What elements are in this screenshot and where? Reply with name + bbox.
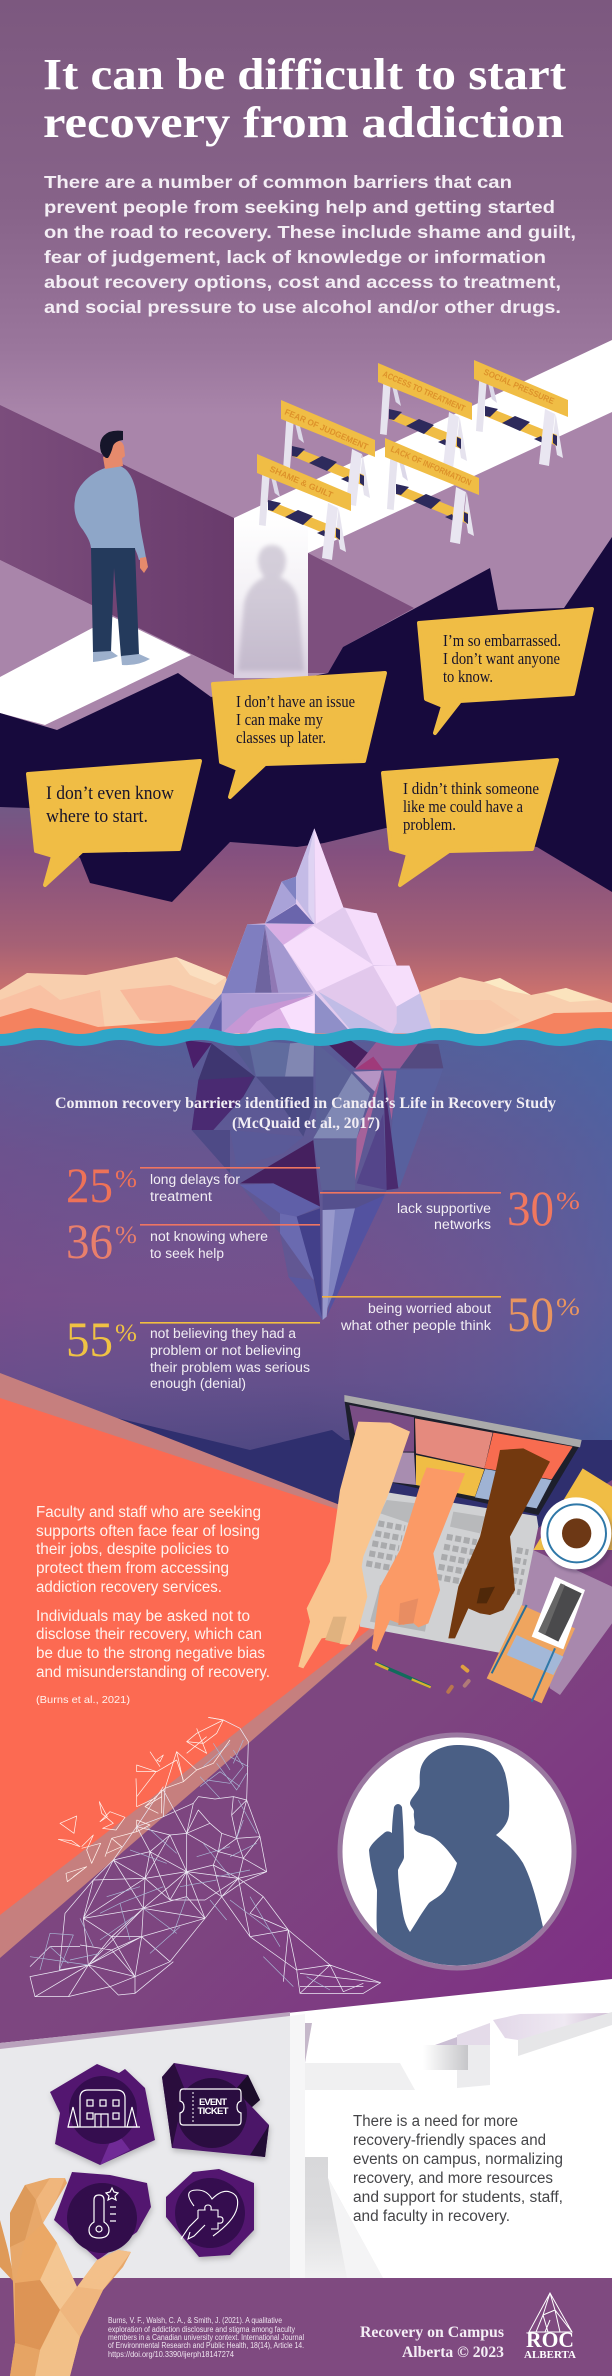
logo: ROC Alberta: ALBERTA: [524, 2349, 576, 2361]
sweater: [74, 465, 146, 560]
speech bubble: where to start: where to start.: [46, 807, 148, 827]
shushing silhouette: [369, 1745, 543, 1985]
barricade: social pressure: [474, 360, 568, 466]
speech bubble: no issue: I can make my: [236, 710, 324, 729]
speech bubble: someone like me: I didn’t think someone: [403, 779, 539, 798]
coral panel text: and misunderstanding of recovery.: [36, 1664, 270, 1681]
barricade: shame and guilt: [257, 454, 351, 560]
coral panel text: Individuals may be asked not to: [36, 1608, 250, 1625]
stat: 50 percent: 50: [507, 1286, 554, 1342]
mesh: blue accent lines: [30, 1740, 330, 1990]
need for spaces text: and faculty in recovery.: [353, 2208, 510, 2225]
laptop screen bezel: [344, 1399, 580, 1515]
badge: campus building: [50, 2064, 155, 2165]
coffee saucer and cup: [541, 1497, 612, 1573]
pen: [375, 1663, 431, 1687]
muted stripe: [0, 1373, 400, 1958]
stat: 55 percent: not believing they had a: [150, 1326, 297, 1341]
icon: thermometer and star: [89, 2188, 118, 2238]
speech bubble: someone like me: problem.: [403, 815, 456, 834]
barricade: shame and guilt: SHAME & GUILT: [268, 464, 335, 500]
white lit gap band: [234, 518, 308, 678]
pale arm: [298, 1422, 410, 1668]
stat: 50 percent: %: [556, 1294, 580, 1321]
speech bubble: embarrassed: I’m so embarrassed.: [443, 631, 561, 650]
chart heading: (McQuaid et al., 2017): [232, 1115, 380, 1132]
yellow sheet: [533, 1468, 612, 1550]
need for spaces text: recovery, and more resources: [353, 2170, 553, 2187]
stat: 55 percent: 55: [66, 1311, 113, 1367]
copyright: Alberta © 2023: [402, 2344, 504, 2361]
left wall panel: [0, 2016, 290, 2279]
stat: 50 percent: being worried about: [368, 1301, 491, 1316]
barricade: fear of judgement: FEAR OF JUDGEMENT: [283, 407, 370, 452]
barricade: social pressure: SOCIAL PRESSURE: [482, 367, 556, 406]
badge: event ticket: [162, 2063, 269, 2157]
brown arm: [448, 1448, 550, 1638]
speech bubble: no issue: [213, 673, 385, 797]
citation: [108, 2316, 304, 2359]
stat: 55 percent: problem or not believing: [150, 1343, 301, 1358]
paper clips: [445, 1664, 471, 1695]
speech bubble: where to start: I don’t even know: [46, 784, 175, 804]
lower purple background: [0, 1480, 612, 2050]
coral panel text: supports often face fear of losing: [36, 1523, 260, 1540]
hand: [140, 557, 148, 573]
stat: 55 percent: %: [115, 1320, 137, 1347]
intro paragraph: on the road to recovery. These include shame and guilt,: [44, 222, 576, 242]
shadow of person in gap: [238, 545, 304, 671]
stat: 36 percent: 36: [66, 1213, 113, 1269]
stat: 55 percent: [66, 1311, 320, 1391]
stat: 30 percent: [320, 1180, 580, 1236]
white lower section: [0, 1979, 612, 2280]
intro paragraph: about recovery options, cost and access to treatment,: [44, 272, 561, 292]
need for spaces text: events on campus, normalizing: [353, 2151, 563, 2168]
coral panel text: disclose their recovery, which can: [36, 1626, 262, 1643]
speech bubble: embarrassed: [419, 609, 592, 733]
coral panel text: their jobs, despite policies to: [36, 1541, 229, 1558]
stat: 30 percent: 30: [507, 1180, 554, 1236]
lit vertical band: [290, 2014, 305, 2279]
citation: Burns, V. F., Walsh, C. A., & Smith, J. (2021). A qualitative: [108, 2316, 282, 2325]
stat: 25 percent: [66, 1157, 320, 1213]
citation: members in a Canadian university context. International Journal: [108, 2333, 304, 2342]
badge: event ticket: TICKET: [198, 2106, 229, 2117]
chart heading: [55, 1095, 556, 1132]
coral panel: [0, 1398, 400, 1915]
architecture shapes: [305, 2012, 612, 2278]
coral panel text: be due to the strong negative bias: [36, 1645, 265, 1662]
stat: 55 percent: their problem was serious: [150, 1360, 310, 1375]
chasm left wall: [0, 405, 234, 675]
coral panel text: addiction recovery services.: [36, 1579, 222, 1596]
stat: 30 percent: lack supportive: [397, 1201, 491, 1216]
floating wireframe fragments: [58, 1717, 230, 1882]
stat: 36 percent: [66, 1213, 320, 1269]
low-poly hand: [0, 2178, 131, 2376]
notebook: [487, 1605, 575, 1703]
dark night background with jagged edge: [0, 537, 612, 902]
stat: 36 percent: not knowing where: [150, 1229, 268, 1244]
need for spaces text: [353, 2113, 563, 2225]
stat: 30 percent: networks: [434, 1217, 491, 1232]
intro paragraph: prevent people from seeking help and getting started: [44, 197, 555, 217]
badge: event ticket: EVENT: [199, 2097, 227, 2108]
intro paragraph: There are a number of common barriers that can: [44, 172, 512, 192]
citation: of Environmental Research and Public Health, 18(14), Article 14.: [108, 2341, 304, 2350]
pants: [91, 548, 139, 657]
speech bubble: where to start: [28, 761, 200, 885]
lilac sheet: [522, 1550, 612, 1695]
purple wedge shadow: [0, 2012, 290, 2049]
chart heading: Common recovery barriers identified in Canada’s Life in Recovery Study: [55, 1095, 556, 1112]
background: top purple field: [0, 0, 612, 830]
barricade: lack of information: [385, 438, 479, 544]
need for spaces text: There is a need for more: [353, 2113, 518, 2130]
person standing at the chasm: [74, 431, 150, 665]
stat: 25 percent: treatment: [150, 1189, 212, 1204]
speech bubble: someone like me: [383, 760, 557, 885]
orange arm: [372, 1467, 465, 1652]
iceberg below water: [185, 1040, 443, 1320]
hair: [100, 431, 123, 458]
citation: exploration of addiction disclosure and stigma among faculty: [108, 2325, 295, 2334]
need for spaces text: and support for students, staff,: [353, 2189, 563, 2206]
stat: 36 percent: to seek help: [150, 1246, 224, 1261]
speech bubble: embarrassed: to know.: [443, 667, 493, 686]
footer band: [0, 2278, 612, 2376]
stat: 36 percent: %: [115, 1222, 137, 1249]
lower white road: [0, 617, 191, 725]
badge: thermometer: [54, 2172, 151, 2260]
keyboard and trackpad: [366, 1500, 528, 1632]
coral panel text: protect them from accessing: [36, 1560, 229, 1577]
barricade: access to treatment: [378, 363, 472, 469]
neck and face: [103, 441, 125, 469]
title: It can be difficult to start: [43, 50, 566, 99]
coral panel text: (Burns et al., 2021): [36, 1694, 130, 1706]
mountains left and right: [0, 957, 612, 1035]
phone: [532, 1577, 585, 1649]
title: recovery from addiction: [43, 98, 564, 147]
logo: ROC Alberta: ROC: [526, 2327, 574, 2352]
icon: ticket: [180, 2089, 241, 2125]
badge: heart and puzzle hand: [166, 2169, 254, 2257]
water wave: [0, 1034, 612, 1040]
lower ground: [0, 560, 234, 730]
desk: laptop, hands and objects: [298, 1395, 612, 1703]
speech bubble: someone like me: like me could have a: [403, 797, 524, 816]
speech bubble: no issue: classes up later.: [236, 728, 326, 747]
copyright: Recovery on Campus: [360, 2324, 504, 2341]
underwater background: [0, 1038, 612, 1468]
coral panel text: Faculty and staff who are seeking: [36, 1504, 261, 1521]
speech bubble: embarrassed: I don’t want anyone: [443, 649, 560, 668]
icon: building: [68, 2090, 140, 2127]
intro paragraph: and social pressure to use alcohol and/or other drugs.: [44, 297, 561, 317]
sky gradient: [0, 790, 612, 1040]
wireframe seated figure: [30, 1717, 381, 1997]
title: [43, 50, 566, 147]
navy mountain behind laptop: [117, 1418, 612, 1720]
road: upper white road: [234, 340, 612, 553]
mesh: pale body lines: [30, 1717, 381, 1997]
stat: 25 percent: long delays for: [150, 1172, 241, 1187]
barricade: lack of information: LACK OF INFORMATION: [389, 444, 473, 488]
iceberg above water: [185, 828, 433, 1033]
speech bubble: no issue: I don’t have an issue: [236, 692, 355, 711]
intro paragraph: [44, 172, 576, 317]
barricade: access to treatment: ACCESS TO TREATMENT: [381, 369, 467, 414]
stat: 50 percent: [322, 1286, 580, 1342]
logo: ROC Alberta: [524, 2293, 576, 2361]
coral panel text: [36, 1504, 270, 1706]
copyright: [360, 2324, 504, 2361]
stat: 25 percent: 25: [66, 1157, 113, 1213]
screen tiles: [349, 1405, 573, 1508]
scene: road and chasm: [0, 340, 612, 730]
icon: heart with puzzle piece: [181, 2190, 238, 2239]
circle with silhouette: [340, 1735, 574, 1985]
shoes: [93, 651, 150, 665]
stat: 25 percent: %: [115, 1166, 137, 1193]
citation: https://doi.org/10.3390/ijerph18147274: [108, 2350, 235, 2359]
intro paragraph: fear of judgement, lack of knowledge or information: [44, 247, 546, 267]
stat: 30 percent: %: [556, 1188, 580, 1215]
stat: 55 percent: enough (denial): [150, 1376, 246, 1391]
barricade: fear of judgement: [281, 400, 375, 506]
laptop body: [360, 1488, 538, 1655]
stat: 50 percent: what other people think: [340, 1318, 491, 1333]
chasm right wall: [308, 553, 414, 673]
need for spaces text: recovery-friendly spaces and: [353, 2132, 546, 2149]
